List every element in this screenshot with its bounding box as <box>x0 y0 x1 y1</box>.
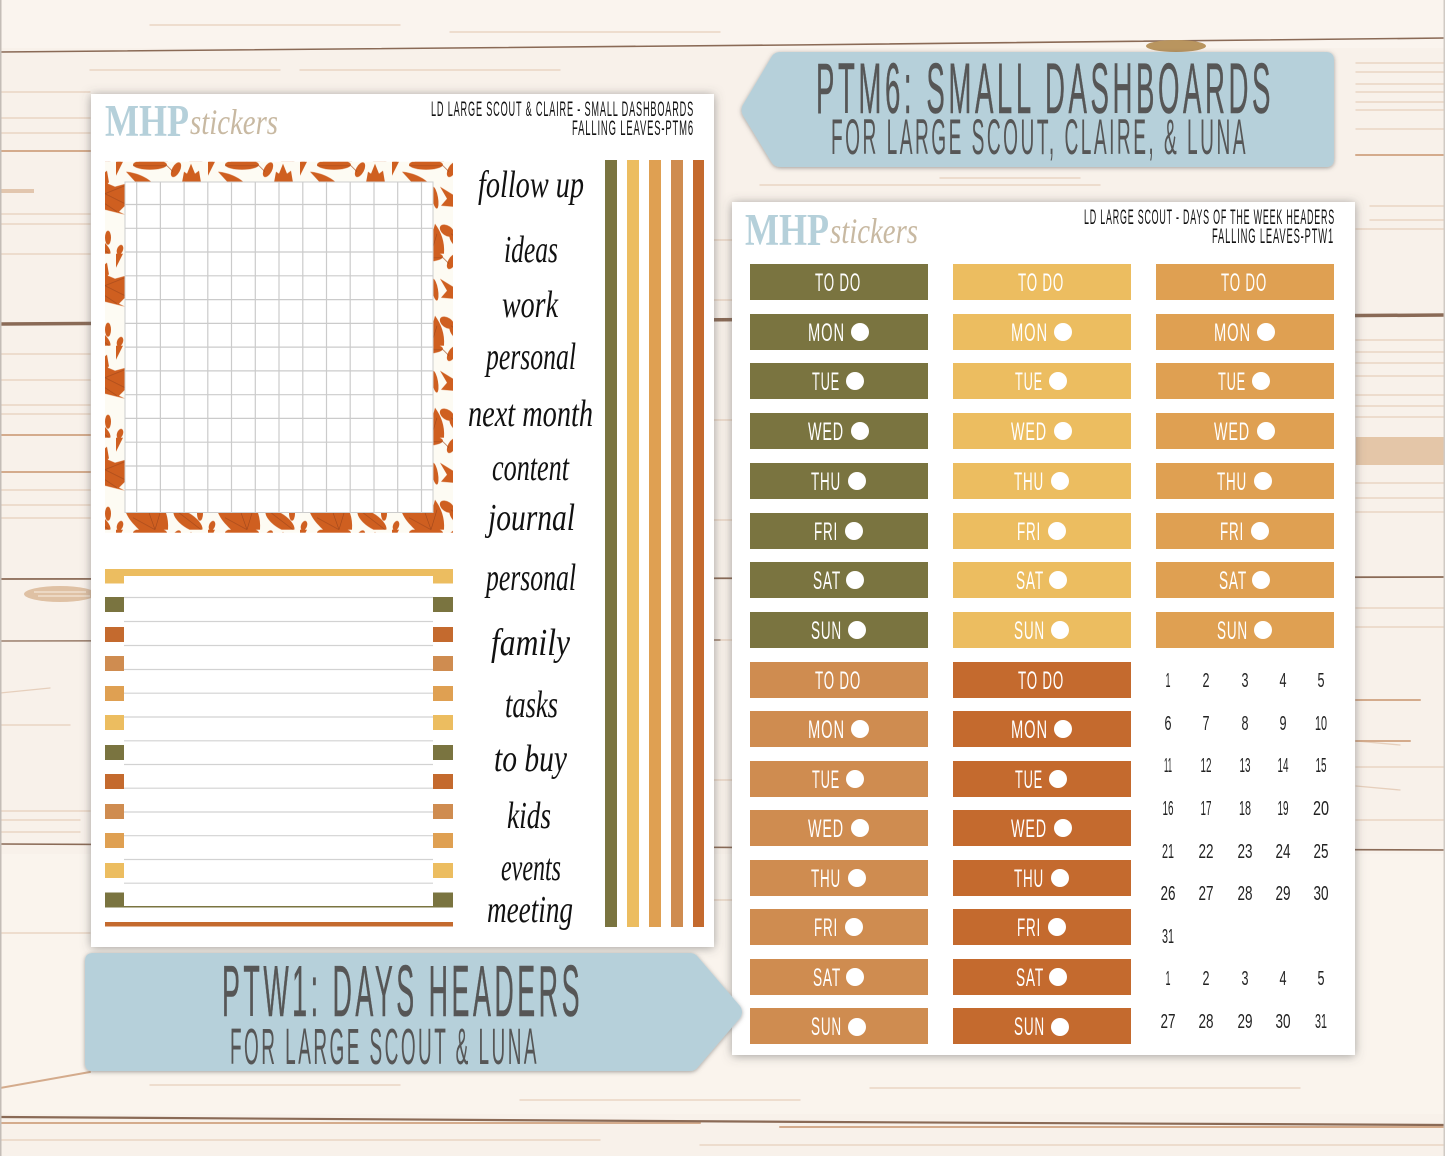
colour stripe stickers <box>605 160 704 927</box>
date number stickers: 2 <box>1202 670 1210 692</box>
date number stickers: 31 <box>1162 926 1174 948</box>
date number stickers: 7 <box>1202 713 1210 735</box>
day headers: yellow column: SAT <box>1016 567 1044 595</box>
day headers: tan column <box>750 662 928 1044</box>
date number stickers: 24 <box>1276 841 1290 863</box>
logo: MHP stickers: stickers <box>830 211 918 251</box>
date number stickers: 23 <box>1238 841 1252 863</box>
day headers: amber column: WED <box>1214 418 1250 446</box>
date number stickers: 6 <box>1164 713 1172 735</box>
panel: left sticker sheet PTM6 <box>91 94 714 947</box>
date number stickers: 1 <box>1166 968 1170 990</box>
day headers: olive column: SUN <box>811 617 842 645</box>
dashboard: autumn leaf frame with grid <box>105 162 453 533</box>
date number stickers: 13 <box>1240 755 1250 777</box>
date number stickers: 3 <box>1242 670 1248 692</box>
date number stickers: 29 <box>1238 1011 1252 1033</box>
day headers: amber column: SUN <box>1217 617 1248 645</box>
date number stickers: 30 <box>1276 1011 1290 1033</box>
day headers: orange column: FRI <box>1017 914 1041 942</box>
day headers: olive column: TO DO <box>815 269 861 297</box>
day headers: amber column: MON <box>1214 319 1251 347</box>
script word stickers: journal <box>484 497 575 539</box>
date number stickers: 18 <box>1239 798 1251 820</box>
script word stickers: kids <box>507 795 551 837</box>
day headers: yellow column: MON <box>1011 319 1048 347</box>
day headers: tan column: SAT <box>813 964 841 992</box>
logo: MHP stickers: stickers <box>190 102 278 142</box>
script word stickers: personal <box>484 557 576 599</box>
date number stickers: 4 <box>1280 968 1286 990</box>
logo: MHP stickers: MHP <box>745 205 829 255</box>
date number stickers: 9 <box>1280 713 1286 735</box>
script word stickers: events <box>501 847 561 889</box>
date number stickers: 21 <box>1162 841 1174 863</box>
day headers: orange column: SUN <box>1014 1013 1045 1041</box>
day headers: olive column: SAT <box>813 567 841 595</box>
date number stickers: 25 <box>1314 841 1328 863</box>
day headers: amber column: FRI <box>1220 518 1244 546</box>
day headers: orange column: MON <box>1011 716 1048 744</box>
script word stickers: personal <box>484 336 576 378</box>
date number stickers: 26 <box>1160 883 1176 905</box>
date number stickers: 27 <box>1198 883 1214 905</box>
day headers: orange column: SAT <box>1016 964 1044 992</box>
day headers: yellow column: TUE <box>1015 368 1043 396</box>
script word stickers: family <box>491 622 570 664</box>
sheet title <box>431 98 694 140</box>
script word stickers: work <box>502 284 559 326</box>
day headers: yellow column: TO DO <box>1018 269 1064 297</box>
day headers: tan column: WED <box>808 815 844 843</box>
day headers: yellow column: WED <box>1011 418 1047 446</box>
day headers: olive column: FRI <box>814 518 838 546</box>
day headers: yellow column <box>953 264 1131 648</box>
day headers: amber column: TUE <box>1218 368 1246 396</box>
day headers: olive column <box>750 264 928 648</box>
day headers: yellow column: THU <box>1014 468 1044 496</box>
arrow banner: PTM6 small dashboards <box>742 50 1334 167</box>
day headers: olive column: MON <box>808 319 845 347</box>
logo: MHP stickers <box>105 96 278 146</box>
day headers: amber column: SAT <box>1219 567 1247 595</box>
dashboard: lined list with coloured tabs <box>105 569 453 926</box>
date number stickers: 5 <box>1318 670 1324 692</box>
logo: MHP stickers <box>745 205 918 255</box>
arrow banner: PTW1 days headers <box>85 952 742 1075</box>
date number stickers: 10 <box>1315 713 1327 735</box>
date number stickers: 16 <box>1162 798 1174 820</box>
date number stickers: 17 <box>1200 798 1212 820</box>
day headers: tan column: TO DO <box>815 667 861 695</box>
panel: left sticker sheet PTM6: FALLING LEAVES-PTM6 <box>572 117 694 140</box>
day headers: tan column: THU <box>811 865 841 893</box>
day headers: orange column: TO DO <box>1018 667 1064 695</box>
date number stickers <box>1160 670 1329 1033</box>
script word stickers: to buy <box>494 738 567 780</box>
text: LD LARGE SCOUT & CLAIRE - SMALL DASHBOARDS <box>431 98 694 121</box>
date number stickers: 3 <box>1242 968 1248 990</box>
date number stickers: 12 <box>1200 755 1212 777</box>
script word stickers: next month <box>468 393 593 435</box>
day headers: tan column: FRI <box>814 914 838 942</box>
day headers: amber column: TO DO <box>1221 269 1267 297</box>
day headers: olive column: WED <box>808 418 844 446</box>
date number stickers: 14 <box>1278 755 1288 777</box>
date number stickers: 20 <box>1313 798 1329 820</box>
day headers: tan column: TUE <box>812 766 840 794</box>
day headers: olive column: THU <box>811 468 841 496</box>
date number stickers: 5 <box>1318 968 1324 990</box>
date number stickers: 29 <box>1276 883 1290 905</box>
date number stickers: 11 <box>1164 755 1172 777</box>
day headers: orange column: TUE <box>1015 766 1043 794</box>
date number stickers: 30 <box>1314 883 1328 905</box>
date number stickers: 1 <box>1166 670 1170 692</box>
day headers: orange column <box>953 662 1131 1044</box>
arrow banner: PTW1 days headers: PTW1: DAYS HEADERS <box>222 952 583 1032</box>
day headers: amber column: THU <box>1217 468 1247 496</box>
logo: MHP stickers: MHP <box>105 96 189 146</box>
day headers: amber column <box>1156 264 1334 648</box>
day headers: orange column: WED <box>1011 815 1047 843</box>
day headers: yellow column: FRI <box>1017 518 1041 546</box>
arrow banner: PTW1 days headers: FOR LARGE SCOUT & LUNA <box>230 1018 539 1075</box>
sheet title <box>1084 206 1335 248</box>
date number stickers: 2 <box>1202 968 1210 990</box>
date number stickers: 8 <box>1242 713 1248 735</box>
date number stickers: 31 <box>1315 1011 1327 1033</box>
script word stickers: meeting <box>487 889 573 931</box>
panel: right sticker sheet PTW1 <box>732 202 1355 1055</box>
date number stickers: 27 <box>1160 1011 1176 1033</box>
script word stickers: follow up <box>478 164 584 206</box>
date number stickers: 4 <box>1280 670 1286 692</box>
date number stickers: 19 <box>1278 798 1288 820</box>
day headers: tan column: SUN <box>811 1013 842 1041</box>
day headers: olive column: TUE <box>812 368 840 396</box>
day headers: orange column: THU <box>1014 865 1044 893</box>
date number stickers: 15 <box>1316 755 1326 777</box>
date number stickers: 28 <box>1198 1011 1214 1033</box>
script word stickers: tasks <box>505 684 558 726</box>
script word stickers <box>468 164 593 931</box>
date number stickers: 22 <box>1198 841 1214 863</box>
date number stickers: 28 <box>1238 883 1252 905</box>
day headers: tan column: MON <box>808 716 845 744</box>
script word stickers: ideas <box>504 229 558 271</box>
day headers: yellow column: SUN <box>1014 617 1045 645</box>
script word stickers: content <box>492 447 570 489</box>
